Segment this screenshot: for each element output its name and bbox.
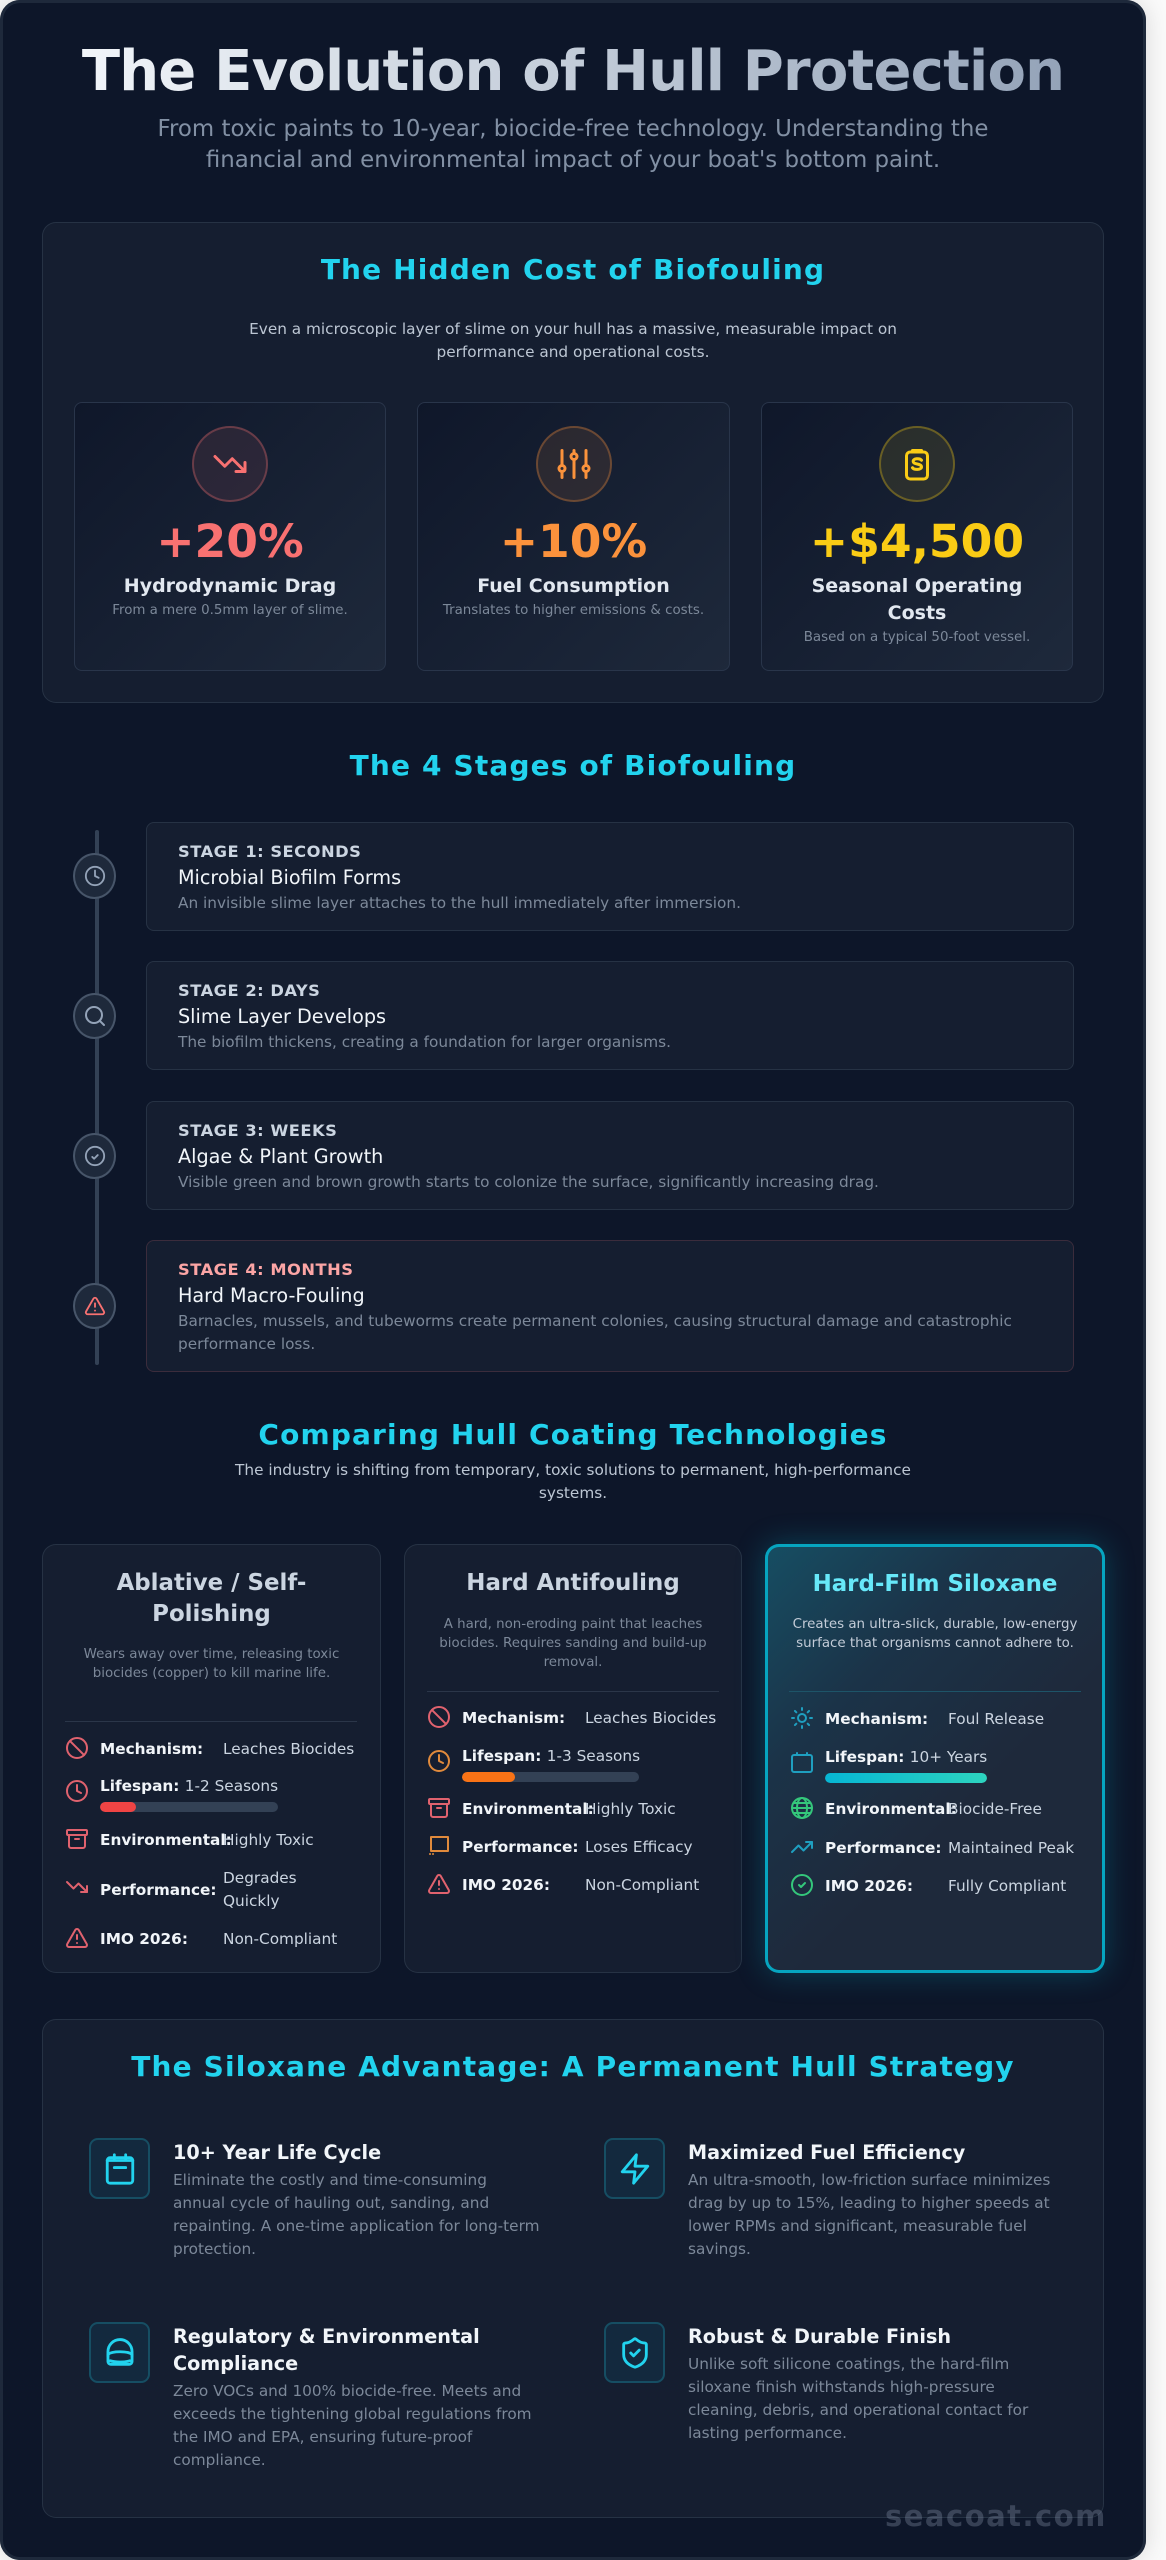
card description: Creates an ultra-slick, durable, low-energy: [793, 1617, 1077, 1632]
stage label: STAGE 4: MONTHS: [178, 1260, 353, 1279]
row: performance: Quickly: [223, 1892, 280, 1910]
card: hard-film siloxane (highlighted): [765, 1544, 1105, 1973]
feature text: exceeds the tightening global regulations from: [173, 2405, 532, 2423]
subtitle: [158, 116, 988, 173]
feature text: repainting. A one-time application for long-term: [173, 2217, 540, 2235]
row: environmental: Highly Toxic: [223, 1830, 314, 1848]
row: performance: [791, 1838, 1074, 1856]
row: performance: [66, 1868, 297, 1910]
icon: sliders: [536, 426, 612, 502]
stat value: +$4,500: [810, 515, 1024, 568]
feature text: siloxane finish withstands high-pressure: [688, 2378, 995, 2396]
stage description: Barnacles, mussels, and tubeworms create permanent colonies, causing structural damage and catastrophic: [178, 1312, 1012, 1330]
feature: robust finish: [604, 2322, 1028, 2442]
row: IMO 2026: IMO 2026:: [100, 1930, 188, 1948]
title: The Evolution of Hull Protection: [82, 39, 1064, 104]
heading: hidden cost: The Hidden Cost of Biofouling: [321, 253, 825, 286]
stat value: +20%: [156, 515, 304, 568]
feature title: Maximized Fuel Efficiency: [688, 2140, 965, 2164]
card description: [84, 1647, 339, 1681]
feature title: 10+ Year Life Cycle: [173, 2140, 381, 2164]
timeline node: check: [73, 1133, 116, 1179]
feature title: Robust & Durable Finish: [688, 2324, 951, 2348]
subtitle: financial and environmental impact of your boat's bottom paint.: [206, 147, 940, 173]
timeline node: search: [73, 993, 116, 1039]
stage 1 card: [146, 822, 1074, 931]
timeline line: [95, 830, 99, 1365]
row: environmental: [791, 1797, 1042, 1819]
feature text: savings.: [688, 2240, 751, 2258]
stat note: Translates to higher emissions & costs.: [443, 603, 704, 618]
intro text: Even a microscopic layer of slime on your hull has a massive, measurable impact on: [249, 320, 897, 338]
stage label: STAGE 3: WEEKS: [178, 1121, 337, 1140]
stage title: Algae & Plant Growth: [178, 1145, 383, 1168]
timeline node: warning: [73, 1283, 116, 1329]
feature title: [173, 2324, 480, 2374]
comparison intro: The industry is shifting from temporary, toxic solutions to permanent, high-performance: [235, 1461, 911, 1479]
stage description: An invisible slime layer attaches to the hull immediately after immersion.: [178, 894, 741, 912]
panel: siloxane advantage: [42, 2019, 1104, 2518]
row: mechanism: Leaches Biocides: [223, 1740, 354, 1758]
row: performance: Performance:: [100, 1880, 217, 1898]
row: lifespan: Lifespan: 1-3 Seasons: [462, 1747, 640, 1765]
feature text: [688, 2171, 1050, 2258]
panel: hidden cost of biofouling: [42, 222, 1104, 703]
feature text: [173, 2171, 540, 2258]
feature text: Unlike soft silicone coatings, the hard-film: [688, 2355, 1009, 2373]
stage description: performance loss.: [178, 1335, 315, 1353]
row: environmental: [428, 1798, 676, 1818]
feature text: lower RPMs and significant, measurable fuel: [688, 2217, 1027, 2235]
row: mechanism: [791, 1707, 1044, 1729]
stat label: Fuel Consumption: [477, 574, 670, 596]
card description: Wears away over time, releasing toxic: [84, 1647, 339, 1662]
feature text: annual cycle of hauling out, sanding, and: [173, 2194, 489, 2212]
row: environmental: Biocide-Free: [948, 1800, 1042, 1818]
row: lifespan: Lifespan: 10+ Years: [825, 1748, 987, 1766]
row: IMO 2026: [791, 1874, 1066, 1896]
row: lifespan: [428, 1747, 640, 1782]
feature text: [688, 2355, 1028, 2442]
icon: dollar document: [879, 426, 955, 502]
stat note: From a mere 0.5mm layer of slime.: [112, 603, 348, 618]
row: IMO 2026: IMO 2026:: [462, 1876, 550, 1894]
row: environmental: Highly Toxic: [585, 1800, 676, 1818]
row: performance: Performance:: [462, 1838, 579, 1856]
icon: shield check: [604, 2322, 665, 2383]
stage description: The biofilm thickens, creating a foundation for larger organisms.: [178, 1033, 671, 1051]
stage title: Microbial Biofilm Forms: [178, 866, 401, 889]
row: lifespan: Lifespan: 1-2 Seasons: [100, 1777, 278, 1795]
stage 2 card: [146, 961, 1074, 1070]
card description: [793, 1617, 1077, 1651]
row: mechanism: Foul Release: [948, 1710, 1044, 1728]
card heading: Hard Antifouling: [466, 1570, 680, 1596]
row: environmental: Environmental:: [462, 1800, 594, 1818]
heading: siloxane advantage: The Siloxane Advantage: A Permanent Hull Strategy: [131, 2050, 1015, 2083]
row: lifespan: [791, 1748, 987, 1783]
card: hard antifouling: [404, 1544, 742, 1973]
row: IMO 2026: Non-Compliant: [585, 1876, 699, 1894]
watermark: seacoat.com: [885, 2499, 1107, 2533]
stage label: STAGE 2: DAYS: [178, 981, 320, 1000]
subtitle: From toxic paints to 10-year, biocide-free technology. Understanding the: [158, 116, 988, 142]
row: mechanism: [428, 1706, 716, 1728]
feature text: Eliminate the costly and time-consuming: [173, 2171, 487, 2189]
icon: lightning: [604, 2138, 665, 2199]
row: performance: Loses Efficacy: [585, 1838, 693, 1856]
feature text: An ultra-smooth, low-friction surface minimizes: [688, 2171, 1050, 2189]
stat card: fuel consumption: [417, 402, 730, 671]
stage 3 card: [146, 1101, 1074, 1210]
row: mechanism: Mechanism:: [462, 1708, 565, 1726]
feature: regulatory compliance: [89, 2322, 532, 2469]
row: lifespan: [66, 1777, 278, 1812]
card description: A hard, non-eroding paint that leaches: [444, 1617, 702, 1632]
row: environmental: [66, 1829, 314, 1849]
stage title: Slime Layer Develops: [178, 1005, 386, 1028]
comparison intro: [234, 1461, 911, 1502]
row: mechanism: Mechanism:: [825, 1710, 928, 1728]
stage description: Visible green and brown growth starts to colonize the surface, significantly increasing drag.: [178, 1173, 879, 1191]
row: mechanism: Mechanism:: [100, 1740, 203, 1758]
card: ablative: [42, 1544, 381, 1973]
row: environmental: Environmental:: [825, 1800, 957, 1818]
feature title: Regulatory & Environmental: [173, 2324, 480, 2348]
feature text: lasting performance.: [688, 2424, 847, 2442]
row: performance: Maintained Peak: [948, 1838, 1074, 1856]
row: IMO 2026: IMO 2026:: [825, 1876, 913, 1894]
stat value: +10%: [500, 515, 647, 568]
feature text: [173, 2382, 532, 2469]
row: IMO 2026: [428, 1874, 699, 1894]
stat label: Hydrodynamic Drag: [124, 574, 336, 596]
card description: [439, 1617, 707, 1670]
feature text: protection.: [173, 2240, 256, 2258]
feature text: Zero VOCs and 100% biocide-free. Meets and: [173, 2382, 521, 2400]
feature: fuel efficiency: [604, 2138, 1050, 2258]
stage description: [178, 1312, 1012, 1353]
card description: biocides. Requires sanding and build-up: [439, 1636, 707, 1651]
row: mechanism: Leaches Biocides: [585, 1708, 716, 1726]
stat label: Costs: [888, 602, 946, 624]
stage 4 card: [146, 1240, 1074, 1372]
heading: comparing coatings: Comparing Hull Coating Technologies: [258, 1418, 888, 1451]
stat label: [812, 574, 1022, 624]
card description: surface that organisms cannot adhere to.: [796, 1636, 1074, 1651]
timeline node: clock: [73, 853, 116, 899]
feature text: cleaning, debris, and operational contact for: [688, 2401, 1028, 2419]
card heading: [116, 1570, 306, 1627]
row: mechanism: [66, 1737, 354, 1759]
stage title: Hard Macro-Fouling: [178, 1284, 365, 1307]
icon: trending down: [192, 426, 268, 502]
heading: 4 stages: The 4 Stages of Biofouling: [350, 749, 796, 782]
feature text: compliance.: [173, 2451, 266, 2469]
row: performance: Degrades: [223, 1868, 297, 1886]
comparison intro: systems.: [539, 1484, 607, 1502]
row: performance: [429, 1836, 693, 1856]
stat card: hydrodynamic drag: [74, 402, 386, 671]
card description: biocides (copper) to kill marine life.: [93, 1666, 330, 1681]
feature: life cycle: [89, 2138, 540, 2258]
icon: calendar: [89, 2138, 150, 2199]
stat label: Seasonal Operating: [812, 574, 1022, 596]
icon: helmet: [89, 2322, 150, 2383]
row: environmental: Environmental:: [100, 1830, 232, 1848]
row: IMO 2026: Fully Compliant: [948, 1876, 1066, 1894]
card description: removal.: [544, 1655, 602, 1670]
feature title: Compliance: [173, 2352, 298, 2374]
intro text: [249, 320, 897, 361]
row: IMO 2026: [66, 1928, 337, 1948]
stage label: STAGE 1: SECONDS: [178, 842, 361, 861]
stat note: Based on a typical 50-foot vessel.: [804, 630, 1030, 645]
card heading: Polishing: [152, 1601, 271, 1627]
card heading: Ablative / Self-: [117, 1570, 306, 1596]
row: performance: Performance:: [825, 1838, 942, 1856]
card heading: Hard-Film Siloxane: [813, 1571, 1057, 1597]
stat card: seasonal operating costs: [761, 402, 1073, 671]
feature text: the IMO and EPA, ensuring future-proof: [173, 2428, 472, 2446]
feature text: drag by up to 15%, leading to higher speeds at: [688, 2194, 1050, 2212]
row: IMO 2026: Non-Compliant: [223, 1930, 337, 1948]
intro text: performance and operational costs.: [437, 343, 709, 361]
